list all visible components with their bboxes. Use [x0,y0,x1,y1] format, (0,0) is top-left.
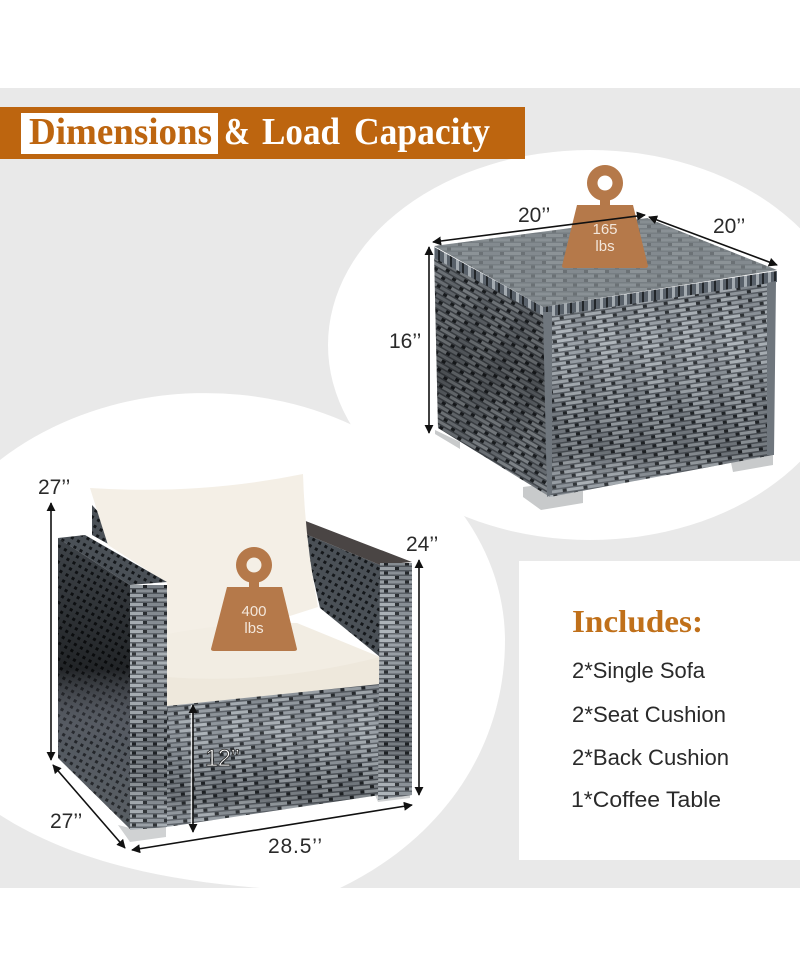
title banner [0,107,525,159]
coffee table illustration [434,218,777,510]
right arm front [378,563,412,800]
table front face [545,272,775,497]
includes heading: Includes: [572,603,703,639]
title banner: Capacity [354,111,490,153]
panel: includes list background [519,561,800,860]
dimension labels: 28.5’’ [268,835,322,858]
includes list [571,658,729,812]
table rim [434,247,777,316]
includes list: 2*Single Sofa [572,658,706,683]
dimension labels: 27’’ [50,810,82,833]
dimension labels: 16’’ [389,330,421,353]
sofa illustration [58,474,412,842]
seat cushion [167,623,380,706]
dimension labels: 27’’ [38,476,70,499]
table feet [435,430,773,510]
left arm front [130,585,167,830]
panel: coffee table spotlight [328,150,800,540]
title banner: Load [262,111,340,153]
table left face [434,252,550,497]
includes list: 2*Seat Cushion [572,702,726,727]
includes list: 2*Back Cushion [572,745,729,770]
sofa base [167,684,380,827]
table weight icon: 165 lbs: 165 [592,221,618,238]
sofa weight icon: 400 lbs: 400 [241,603,267,620]
includes list: 1*Coffee Table [571,787,721,812]
dimension labels: 20’’ [518,204,550,227]
panel: sofa spotlight [0,393,505,888]
title banner: Dimensions [29,111,212,153]
table weight icon: 165 lbs: lbs [595,238,615,255]
table weight icon: 165 lbs [562,165,648,268]
dimension labels: 20’’ [713,215,745,238]
left arm outer side [58,535,167,829]
dimension labels: 24’’ [406,533,438,556]
dimension labels [38,204,745,858]
table glass top [434,218,777,307]
dimension labels: 12’’ [205,745,240,772]
dimension arrows [51,215,777,850]
sofa weight icon: 400 lbs: lbs [244,620,264,637]
back cushion [90,474,318,634]
sofa feet [118,790,410,842]
table corner posts [543,281,776,497]
far armrest [92,505,110,545]
title banner: & [224,111,250,153]
sofa weight icon: 400 lbs [211,547,297,651]
